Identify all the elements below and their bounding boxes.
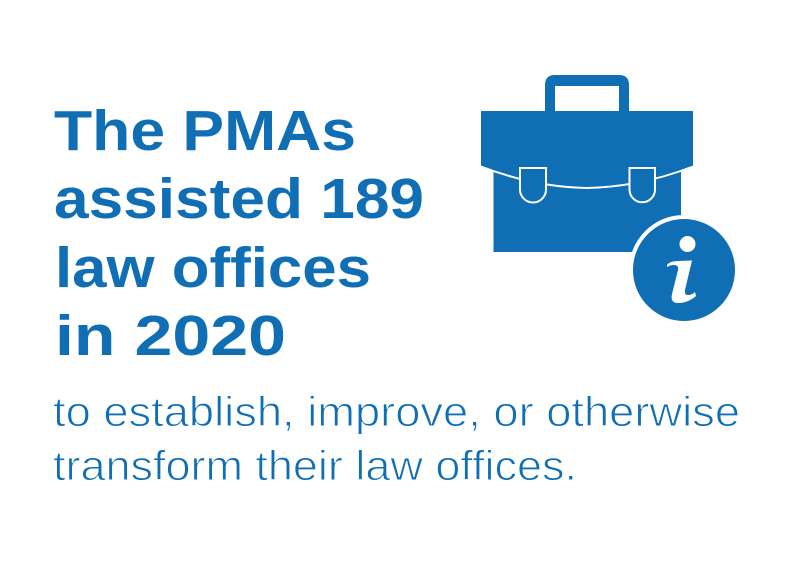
right clasp: [630, 168, 655, 202]
briefcase body: [494, 165, 681, 252]
info dot: [680, 236, 696, 252]
badge ring: [629, 215, 739, 325]
briefcase handle: [545, 75, 629, 112]
icon: briefcase: [481, 75, 693, 252]
subtitle: to establish, improve, or otherwise: [53, 388, 740, 435]
title: law offices: [55, 236, 371, 300]
briefcase flap: [481, 111, 693, 188]
subtitle: [53, 388, 740, 489]
info stem: [667, 260, 696, 303]
subtitle: transform their law offices.: [53, 442, 577, 489]
title: [54, 99, 424, 368]
left clasp: [520, 168, 546, 202]
badge circle: [633, 219, 735, 321]
title: in 2020: [55, 304, 286, 368]
flap edge: [481, 166, 693, 188]
title: The PMAs: [54, 99, 356, 163]
title: assisted 189: [54, 167, 424, 231]
icon: information badge: [629, 215, 739, 325]
